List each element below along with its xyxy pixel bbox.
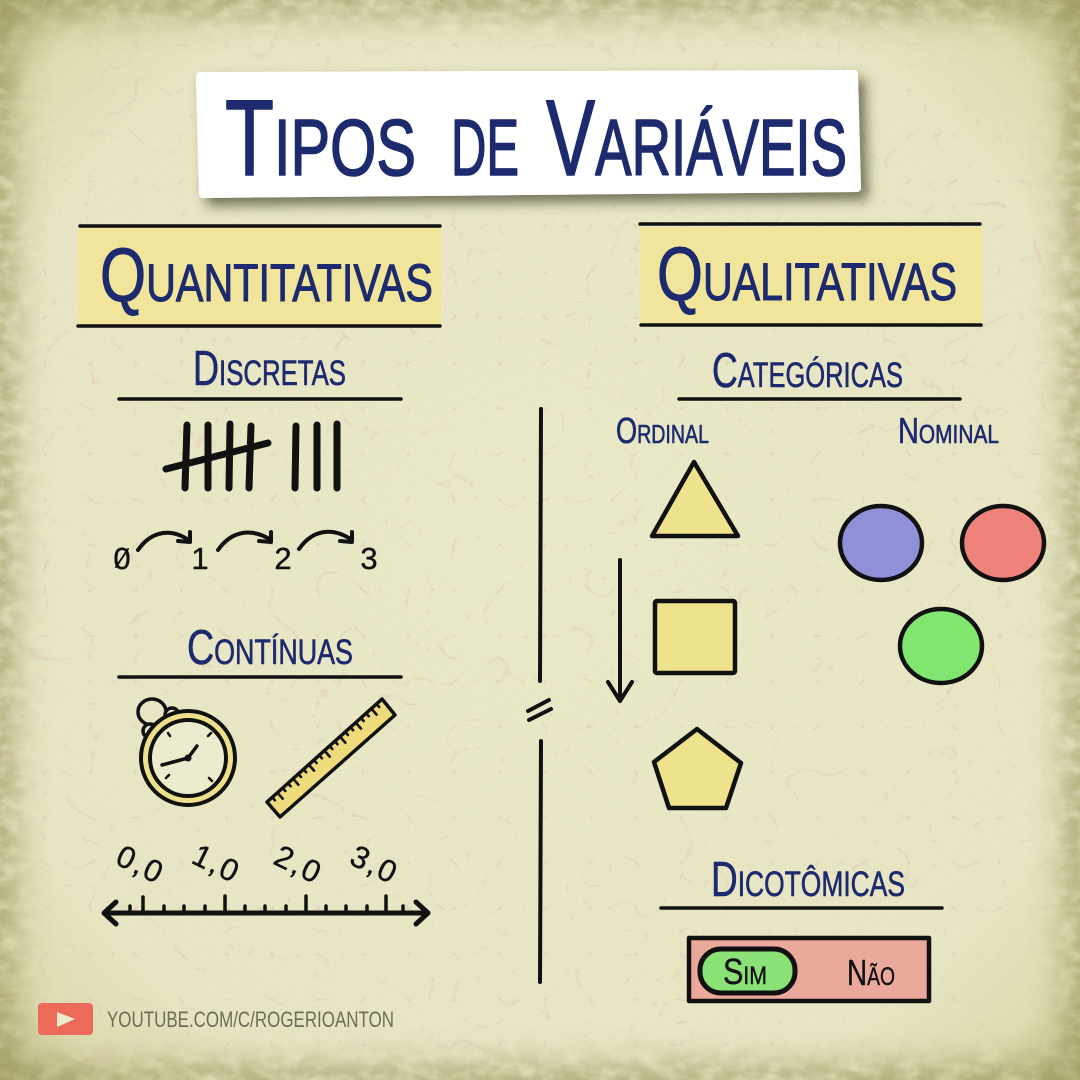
channel url: YOUTUBE.COM/C/ROGERIOANTON xyxy=(107,1007,394,1032)
icon: stopwatch xyxy=(138,699,235,805)
icon: square xyxy=(655,601,735,673)
heading: quantitativas: QUANTITATIVAS xyxy=(100,233,433,318)
title text: DE xyxy=(451,103,519,192)
counting numbers with arrows: 3 xyxy=(360,541,378,576)
counting numbers with arrows: 2 xyxy=(274,541,292,576)
section: discretas xyxy=(113,342,401,576)
counting numbers with arrows: 1 xyxy=(191,541,209,576)
panel: qualitativas heading xyxy=(640,224,982,325)
section: categóricas: CATEGÓRICAS xyxy=(712,344,903,398)
number labels: 3,0 xyxy=(345,838,404,891)
icon: tally marks xyxy=(166,424,337,488)
icon: youtube xyxy=(38,1003,93,1035)
number labels: 1,0 xyxy=(187,837,246,890)
heading: qualitativas: QUALITATIVAS xyxy=(657,232,957,317)
toggle: sim / não: SIM xyxy=(723,951,767,992)
panel: quantitativas heading xyxy=(78,226,441,326)
section: dicotômicas xyxy=(661,853,942,1001)
label: ordinal: ORDINAL xyxy=(616,410,709,451)
section: discretas: DISCRETAS xyxy=(193,342,346,396)
title card xyxy=(200,74,857,198)
toggle: sim / não xyxy=(689,938,929,1001)
section: contínuas: CONTÍNUAS xyxy=(187,621,353,675)
title text xyxy=(225,77,847,198)
number labels: 0,0 xyxy=(111,838,170,891)
icon: blue circle xyxy=(840,506,922,580)
section: dicotômicas: DICOTÔMICAS xyxy=(711,853,905,907)
youtube footer xyxy=(38,1003,394,1035)
icon: pentagon xyxy=(654,729,741,808)
central divider with not-equal sign xyxy=(528,409,551,982)
icon: ruler xyxy=(267,699,395,817)
toggle: sim / não: NÃO xyxy=(847,952,895,993)
counting numbers with arrows xyxy=(113,532,378,576)
icon: triangle xyxy=(652,462,738,536)
title text: TIPOS xyxy=(225,77,416,198)
number labels xyxy=(111,837,404,891)
icon: green circle xyxy=(900,609,982,683)
number labels: 2,0 xyxy=(269,838,328,891)
section: contínuas xyxy=(104,621,428,924)
section: categóricas xyxy=(608,344,1044,808)
icon: red circle xyxy=(962,506,1044,580)
arrow: order xyxy=(608,560,632,701)
label: nominal: NOMINAL xyxy=(898,410,999,451)
counting numbers with arrows: 0 xyxy=(113,541,131,576)
number line xyxy=(104,837,428,924)
title text: VARIÁVEIS xyxy=(546,77,847,198)
